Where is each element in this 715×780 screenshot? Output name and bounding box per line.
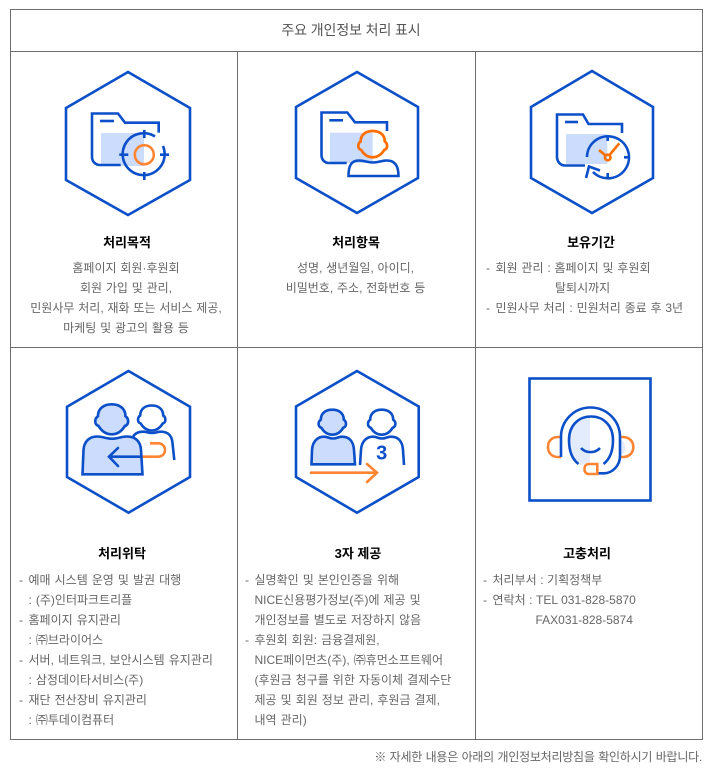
heading: 고충처리	[563, 546, 611, 561]
icon: folder with target	[64, 70, 192, 216]
title: 주요 개인정보 처리 표시	[281, 22, 421, 38]
panel: 고충처리	[483, 377, 652, 627]
text block: -	[245, 633, 249, 647]
footnote: ※ 자세한 내용은 아래의 개인정보처리방침을 확인하시기 바랍니다.	[374, 750, 702, 764]
panel: 보유기간	[486, 70, 683, 315]
heading: 처리위탁	[98, 546, 146, 561]
text block: -	[19, 693, 23, 707]
icon: two people with third-party arrow	[294, 370, 420, 514]
panel: 처리항목	[286, 70, 425, 295]
text block: -	[483, 573, 487, 587]
icon: folder with clock	[530, 70, 654, 214]
text block: 실명확인 및 본인인증을 위해 NICE신용평가정보(주)에 제공 및 개인정보를 별도로 저장하지 않음 후원회 회원: 금융결제원, NICE페이먼츠(주), ㈜휴먼소프트웨어 (후원금 청구를 위한 자동이체 결제수단 제공 및 회원 정보 관리, 후원금 결제, 내역 관리)	[254, 573, 451, 727]
text block: -	[486, 261, 490, 275]
text block: -	[245, 573, 249, 587]
text block: 성명, 생년월일, 아이디, 비밀번호, 주소, 전화번호 등	[286, 261, 425, 295]
text block: -	[19, 653, 23, 667]
panel: 3자 제공	[245, 370, 451, 727]
text block: 홈페이지 회원·후원회 회원 가입 및 관리, 민원사무 처리, 재화 또는 서비스 제공, 마케팅 및 광고의 활용 등	[30, 261, 222, 335]
panel: 처리목적	[30, 70, 222, 335]
text block: 회원 관리 : 홈페이지 및 후원회 탈퇴시까지 민원사무 처리 : 민원처리 종료 후 3년	[496, 261, 683, 315]
text block: -	[19, 573, 23, 587]
icon: headset agent	[528, 377, 652, 502]
panel: 처리위탁	[19, 370, 213, 727]
text block: 처리부서 : 기획정책부 연락처 : TEL 031-828-5870 FAX031-828-5874	[492, 573, 636, 627]
heading: 처리목적	[103, 235, 151, 250]
icon: two people with arrow	[66, 370, 192, 514]
heading: 3자 제공	[335, 546, 381, 561]
text block: -	[19, 613, 23, 627]
text block: -	[486, 301, 490, 315]
icon: folder with person	[294, 70, 420, 214]
heading: 보유기간	[567, 235, 615, 250]
icon: two people with third-party arrow: 3	[376, 442, 387, 464]
text block: 예매 시스템 운영 및 발권 대행 : (주)인터파크트리플 홈페이지 유지관리 : ㈜브라이어스 서버, 네트워크, 보안시스템 유지관리 : 삼정데이타서비스(주) 재단 전산장비 유지관리 : ㈜투데이컴퓨터	[28, 573, 213, 727]
text block: -	[483, 593, 487, 607]
heading: 처리항목	[332, 235, 380, 250]
